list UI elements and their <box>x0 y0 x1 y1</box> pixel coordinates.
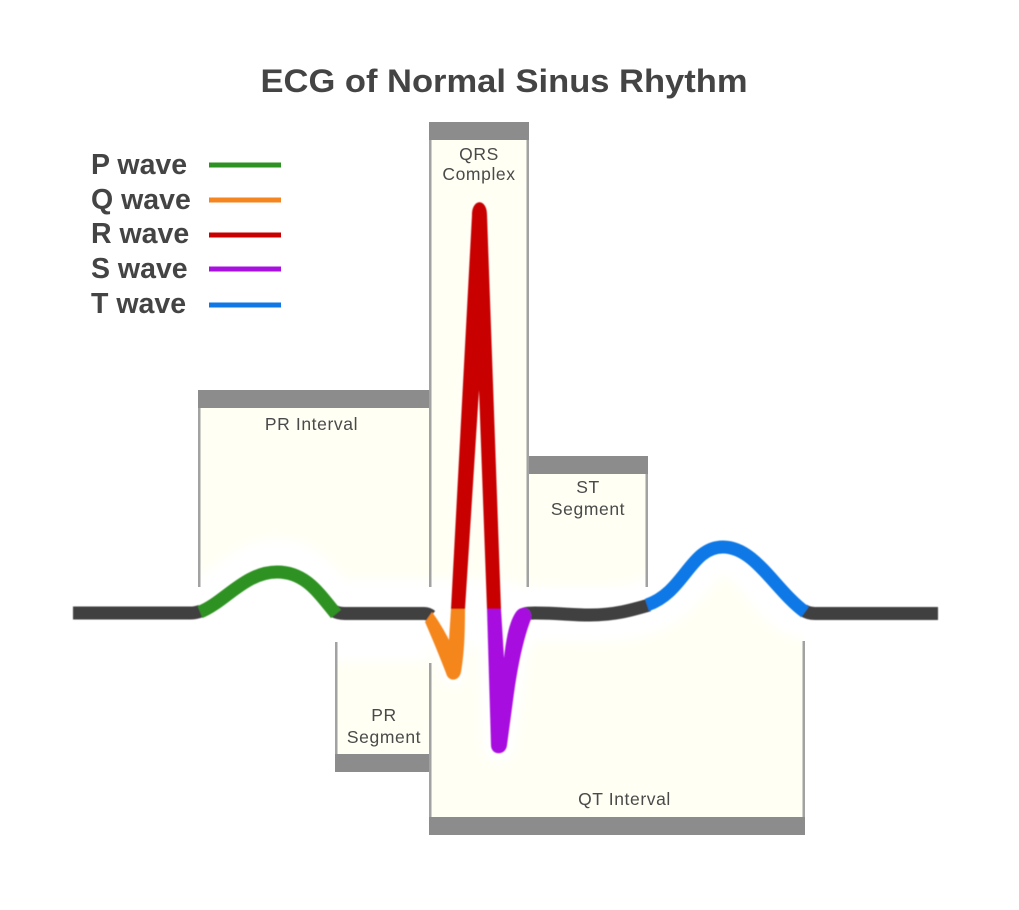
panel: PR interval: PR Interval <box>265 414 358 434</box>
baseline segments <box>73 605 938 616</box>
legend: Q wave: Q wave <box>91 184 191 216</box>
R wave <box>451 202 501 609</box>
panel: PR interval <box>198 390 430 590</box>
ECG trace <box>73 202 938 753</box>
T wave <box>647 547 805 612</box>
panel: QRS complex <box>429 122 529 600</box>
legend: Q wave <box>91 184 281 216</box>
legend: R wave: R wave <box>91 218 189 250</box>
panel: PR segment: Segment <box>347 727 421 747</box>
panel: ST segment: ST <box>576 477 600 497</box>
legend: P wave <box>91 149 281 181</box>
panel: QT interval <box>429 550 805 835</box>
panel: QT interval: QT Interval <box>578 789 671 809</box>
panel: QRS complex: Complex <box>442 164 516 184</box>
legend: R wave <box>91 218 281 250</box>
panel: ST segment: Segment <box>551 499 625 519</box>
S wave <box>487 608 531 753</box>
panel: PR segment <box>335 640 430 772</box>
title: ECG of Normal Sinus Rhythm <box>260 63 748 99</box>
legend: S wave: S wave <box>91 253 188 285</box>
panel: ST segment <box>528 456 648 590</box>
Q wave <box>425 609 465 680</box>
panel: QRS complex: QRS <box>459 144 499 164</box>
legend: P wave: P wave <box>91 149 187 181</box>
panel side lines <box>198 140 805 817</box>
legend <box>91 149 281 320</box>
legend: T wave: T wave <box>91 288 186 320</box>
white halo around trace <box>150 212 900 745</box>
P wave <box>200 572 336 614</box>
legend: T wave <box>91 288 281 320</box>
legend: S wave <box>91 253 281 285</box>
panel: PR segment: PR <box>371 705 397 725</box>
